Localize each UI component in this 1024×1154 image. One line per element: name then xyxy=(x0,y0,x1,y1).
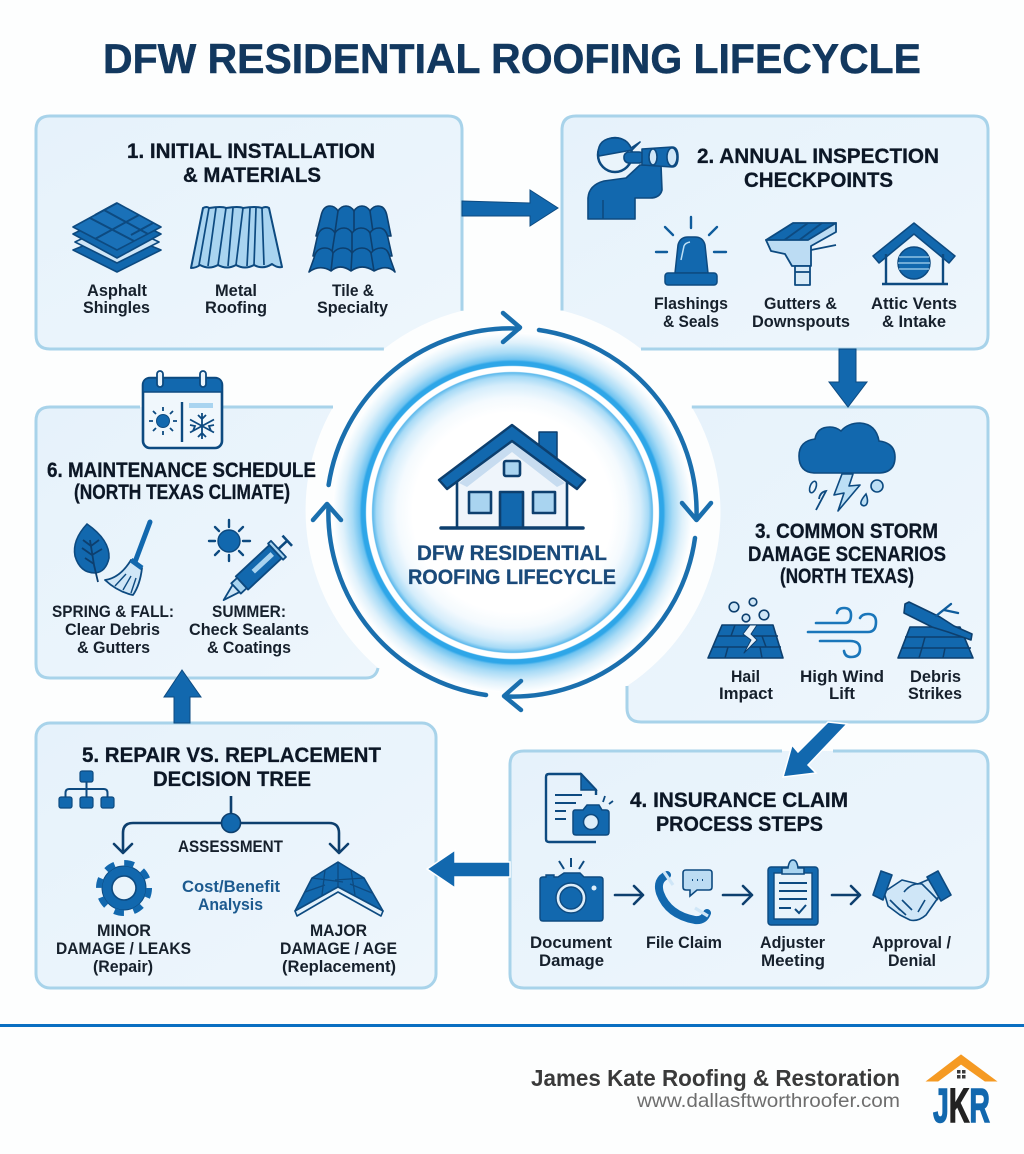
labels: File Claim xyxy=(646,933,722,952)
heading: 3. COMMON STORM xyxy=(755,519,938,543)
arrow: step 3 to 4 xyxy=(832,886,860,904)
decision tree connector xyxy=(114,796,348,853)
panel 4: insurance claim process xyxy=(510,751,988,988)
title: DFW RESIDENTIAL ROOFING LIFECYCLE xyxy=(103,35,921,82)
logo: JKR: JKR xyxy=(933,1080,990,1133)
text: cost benefit analysis: Analysis xyxy=(198,895,263,914)
panel 1: initial installation and materials xyxy=(36,116,462,349)
hub title: ROOFING LIFECYCLE xyxy=(408,565,616,589)
labels: Damage xyxy=(539,951,604,970)
icon: repair gear xyxy=(99,863,149,913)
icon: asphalt shingles xyxy=(73,203,161,272)
icon: house xyxy=(439,425,585,528)
labels: (Replacement) xyxy=(282,957,396,976)
arrow: panel 2 to panel 3 xyxy=(829,349,867,407)
labels xyxy=(654,294,957,331)
icon: hierarchy xyxy=(59,771,114,808)
labels: DAMAGE / AGE xyxy=(280,939,397,958)
labels xyxy=(83,281,389,317)
labels: Strikes xyxy=(908,684,962,703)
labels: Gutters & xyxy=(764,294,837,313)
icon: sun and sealant gun xyxy=(209,520,295,608)
icon: handshake xyxy=(873,871,951,920)
panel 3: common storm damage scenarios xyxy=(627,407,988,722)
labels: Attic Vents xyxy=(871,294,957,313)
labels: Clear Debris xyxy=(65,620,160,639)
icon: attic vent xyxy=(873,223,955,284)
labels: MINOR xyxy=(97,921,151,940)
text: cost benefit analysis: Cost/Benefit xyxy=(182,877,280,896)
labels xyxy=(719,667,962,703)
labels: & Coatings xyxy=(207,638,291,657)
icon: camera xyxy=(540,858,603,921)
heading: & MATERIALS xyxy=(183,163,321,187)
icon: high wind xyxy=(808,608,876,657)
heading: DECISION TREE xyxy=(153,767,311,791)
labels: Check Sealants xyxy=(189,620,309,639)
icon: replacement roof xyxy=(295,862,383,916)
footer company name and url: www.dallasftworthroofer.com xyxy=(636,1090,900,1112)
heading: 1. INITIAL INSTALLATION xyxy=(127,139,375,163)
labels: Shingles xyxy=(83,298,150,317)
labels xyxy=(52,602,309,657)
heading xyxy=(82,743,381,791)
central lifecycle hub xyxy=(313,313,711,710)
heading: (NORTH TEXAS CLIMATE) xyxy=(74,480,290,504)
hub title xyxy=(408,541,616,589)
labels: & Intake xyxy=(882,312,946,331)
labels: Debris xyxy=(910,667,961,686)
text: assessment: ASSESSMENT xyxy=(178,837,284,856)
labels: Downspouts xyxy=(752,312,850,331)
heading: 2. ANNUAL INSPECTION xyxy=(697,144,939,168)
panel 5: repair vs replacement decision tree xyxy=(36,723,436,988)
heading: 5. REPAIR VS. REPLACEMENT xyxy=(82,743,381,767)
panel 6: maintenance schedule xyxy=(36,371,378,678)
heading: CHECKPOINTS xyxy=(744,168,893,192)
icon: hail impact xyxy=(708,598,783,658)
labels xyxy=(56,921,397,976)
heading: 4. INSURANCE CLAIM xyxy=(630,788,848,812)
heading xyxy=(748,519,946,588)
footer company name and url: James Kate Roofing & Restoration xyxy=(531,1065,900,1091)
icon: leaf and broom xyxy=(74,522,150,595)
icon: tile roofing xyxy=(309,206,395,272)
icon: debris strike xyxy=(898,602,973,658)
labels: Lift xyxy=(829,684,855,703)
labels: Approval / xyxy=(872,933,951,952)
labels: High Wind xyxy=(800,667,884,686)
icon: flashing beacon xyxy=(656,217,726,285)
heading xyxy=(697,144,939,192)
hub title: DFW RESIDENTIAL xyxy=(417,541,607,565)
labels: Adjuster xyxy=(760,933,825,952)
heading: PROCESS STEPS xyxy=(656,812,823,836)
arrow: panel 4 to panel 5 xyxy=(427,850,510,888)
labels: (Repair) xyxy=(93,957,153,976)
arrow: panel 1 to panel 2 xyxy=(462,190,558,226)
labels: Roofing xyxy=(205,298,267,317)
labels: Impact xyxy=(719,684,773,703)
icon: inspector with binoculars xyxy=(588,138,678,219)
heading xyxy=(47,458,316,504)
labels: Hail xyxy=(731,667,760,686)
icon: storm cloud xyxy=(799,423,895,511)
icon: seasonal calendar xyxy=(143,371,222,448)
arrow: step 1 to 2 xyxy=(615,886,643,904)
heading: (NORTH TEXAS) xyxy=(780,564,914,588)
labels: Asphalt xyxy=(87,281,147,300)
labels: Meeting xyxy=(761,951,825,970)
logo: JKR xyxy=(927,1055,996,1133)
circular arrows xyxy=(313,313,711,710)
icon: phone with speech bubble xyxy=(659,870,712,920)
arrow: panel 5 to panel 6 xyxy=(164,670,201,723)
labels: Tile & xyxy=(332,281,374,300)
glowing ring xyxy=(332,332,692,692)
footer divider xyxy=(0,1024,1024,1027)
footer company name and url xyxy=(531,1065,900,1112)
heading xyxy=(127,139,375,187)
icon: document with camera xyxy=(546,774,613,842)
labels: Denial xyxy=(888,951,936,970)
labels: Specialty xyxy=(317,298,389,317)
labels xyxy=(530,933,951,970)
labels: Document xyxy=(530,933,612,952)
labels: DAMAGE / LEAKS xyxy=(56,939,191,958)
icon: gutter and downspout xyxy=(766,223,836,285)
labels: & Seals xyxy=(663,312,719,331)
arrow: panel 3 to panel 4 xyxy=(783,722,847,777)
icon: metal roofing xyxy=(191,207,282,268)
heading xyxy=(630,788,848,836)
labels: Flashings xyxy=(654,294,728,313)
labels: SPRING & FALL: xyxy=(52,602,174,621)
text: cost benefit analysis xyxy=(182,877,280,914)
heading: DAMAGE SCENARIOS xyxy=(748,542,946,566)
labels: & Gutters xyxy=(77,638,150,657)
labels: MAJOR xyxy=(310,921,367,940)
heading: 6. MAINTENANCE SCHEDULE xyxy=(47,458,316,482)
icon: clipboard xyxy=(768,860,818,925)
labels: Metal xyxy=(215,281,257,300)
arrow: step 2 to 3 xyxy=(723,886,752,904)
panel 2: annual inspection checkpoints xyxy=(562,116,988,349)
labels: SUMMER: xyxy=(212,602,286,621)
